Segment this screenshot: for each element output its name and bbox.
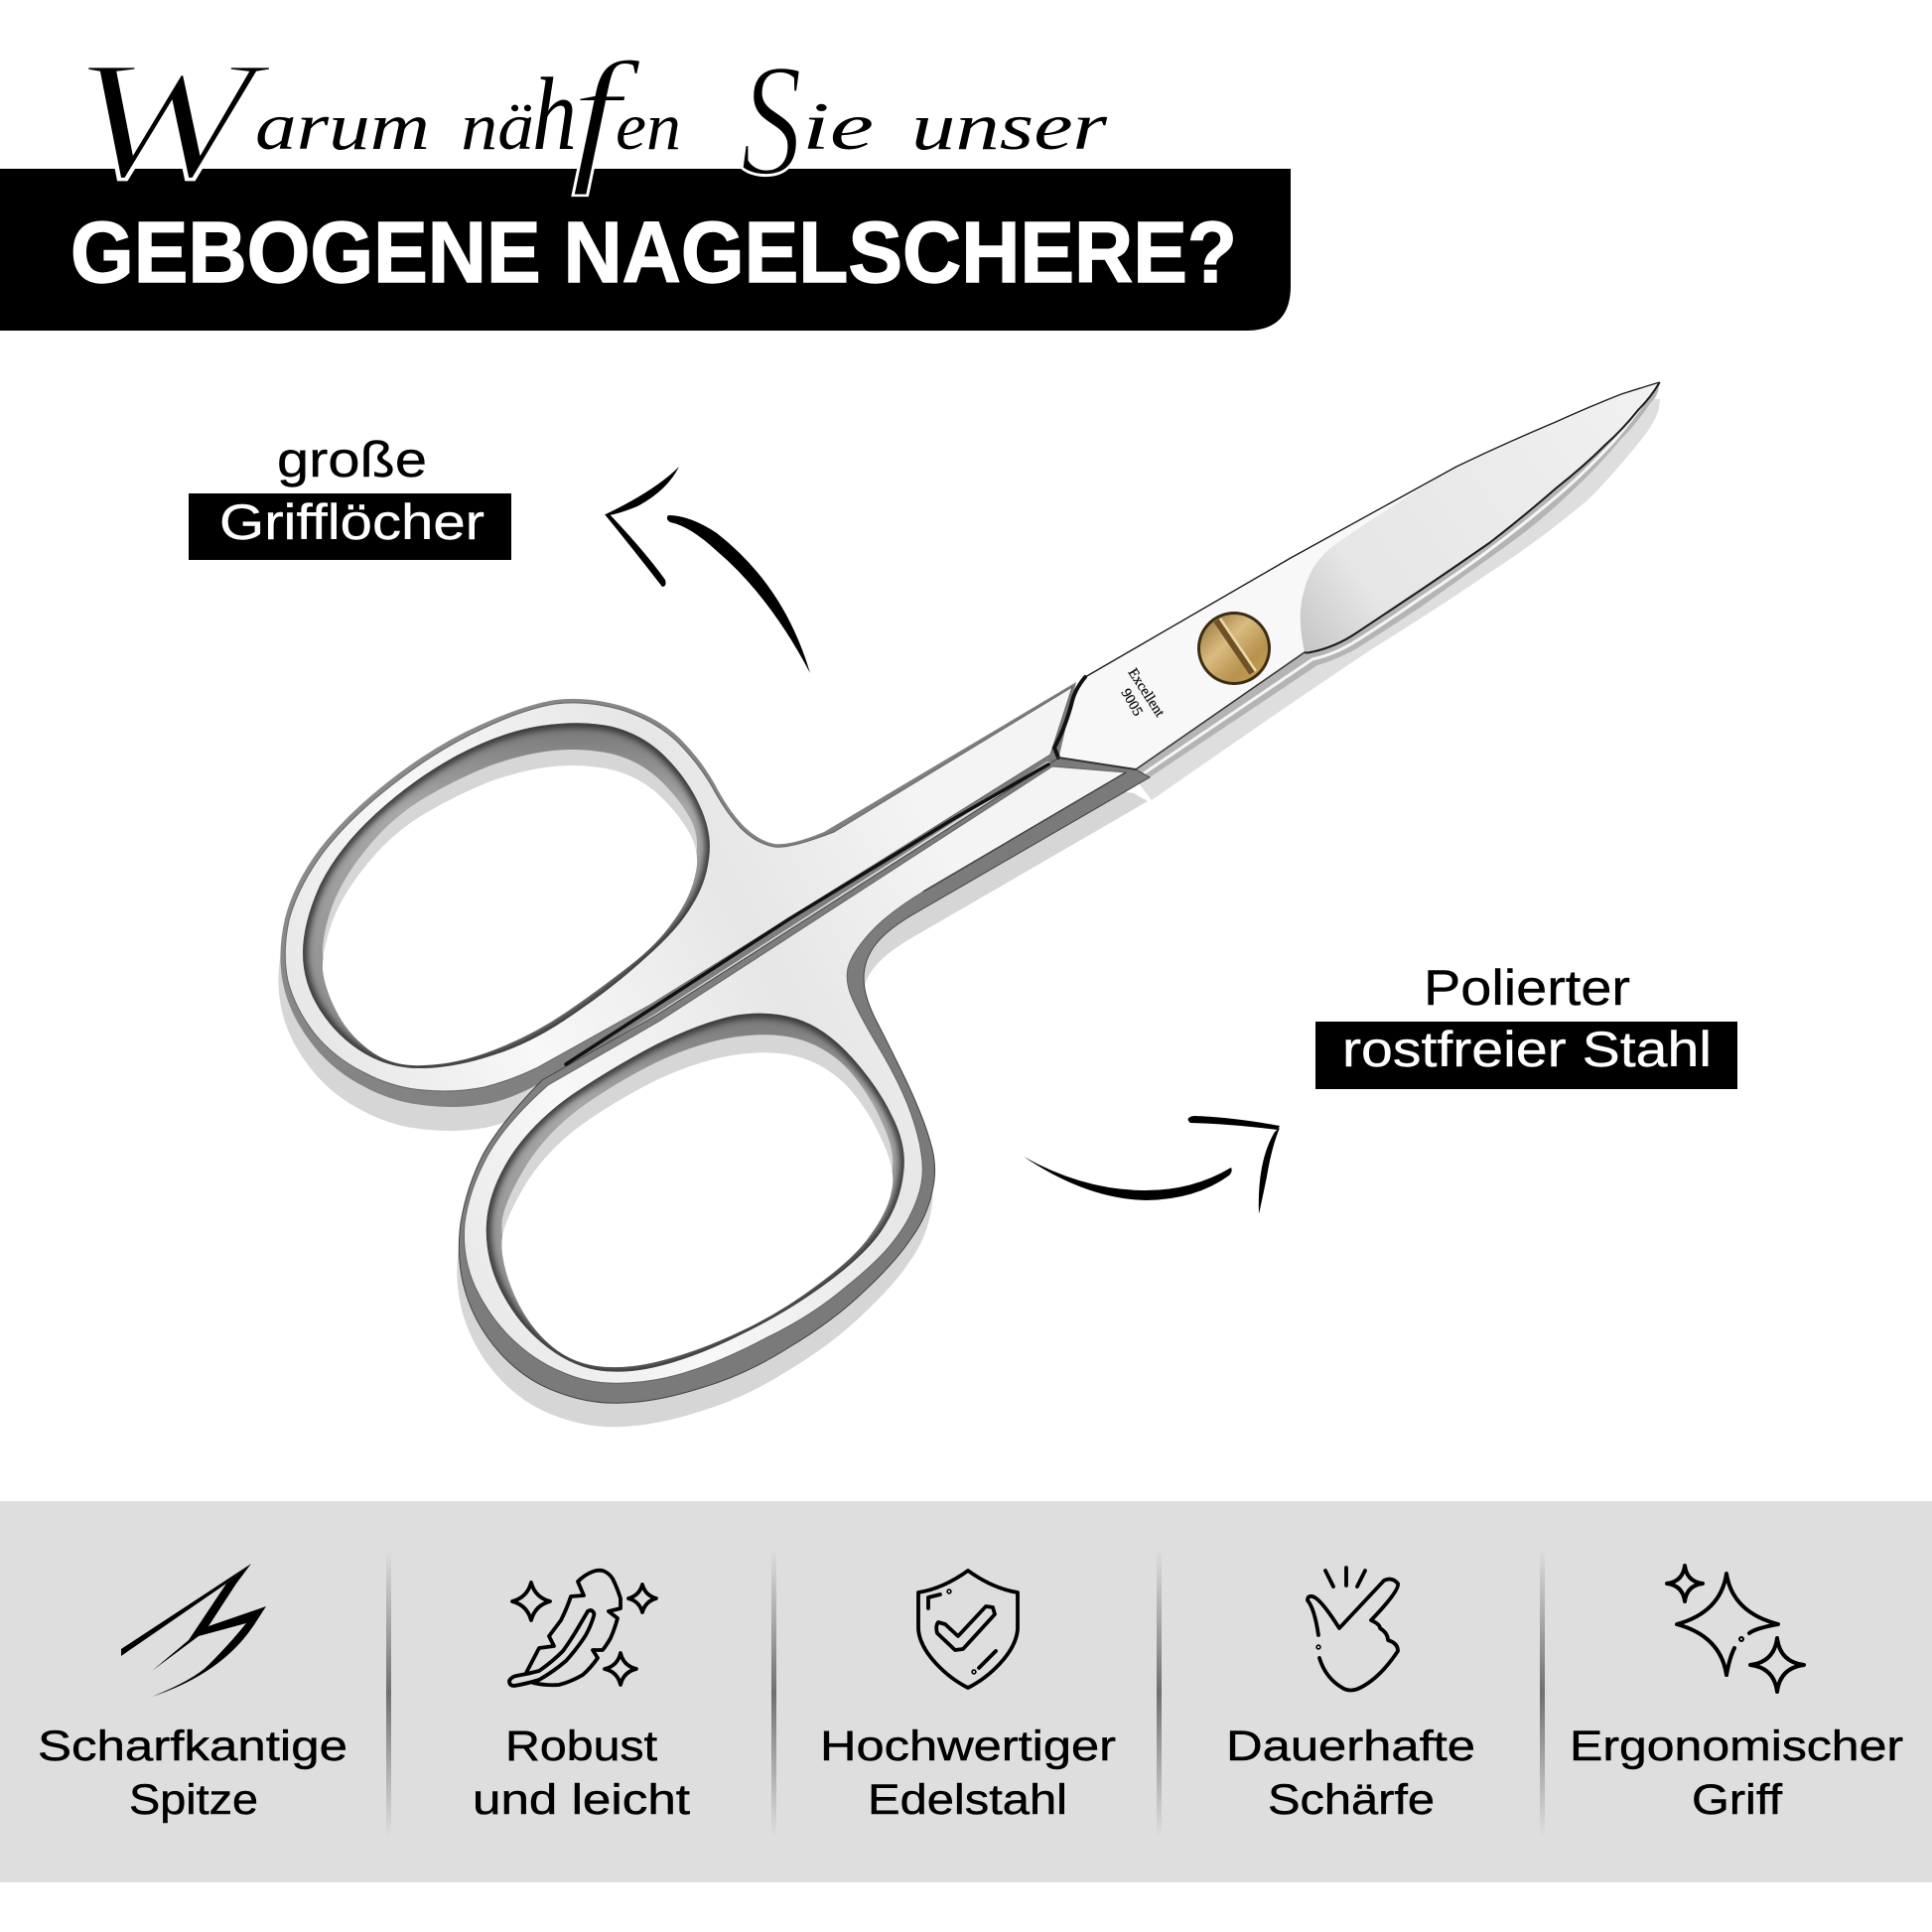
callout: Polierter rostfreier Stahl bbox=[1315, 960, 1737, 1089]
scissors: blade edge lines bbox=[1085, 382, 1660, 677]
scissors: lower blade bbox=[1136, 382, 1660, 777]
heading: script line: nä bbox=[443, 88, 534, 164]
label bbox=[1570, 1723, 1903, 1824]
heading banner bbox=[0, 169, 1291, 331]
scissors: upper handle bbox=[280, 682, 1076, 1107]
heading: script line: W bbox=[71, 27, 272, 213]
scissors: blade hollow bbox=[1301, 382, 1660, 653]
label: Hochwertiger bbox=[820, 1723, 1116, 1770]
label: Edelstahl bbox=[868, 1776, 1067, 1824]
label: Scharfkantige bbox=[38, 1723, 347, 1770]
callout: Polierter rostfreier Stahl: Polierter bbox=[1424, 960, 1630, 1016]
label: und leicht bbox=[473, 1776, 690, 1824]
scissors: upper blade bbox=[1054, 382, 1660, 769]
heading: bold title: GEBOGENE NAGELSCHERE? bbox=[70, 205, 1237, 301]
icon: shield with check bbox=[918, 1571, 1018, 1688]
heading: script line: S bbox=[710, 32, 802, 209]
callout: Polierter rostfreier Stahl: rostfreier Stahl bbox=[1342, 1022, 1712, 1077]
feature: Dauerhafte Schärfe bbox=[1226, 1568, 1475, 1824]
callout: große Grifflöcher bbox=[189, 432, 511, 560]
scissors: engraved brand: 9005 bbox=[1118, 686, 1146, 719]
scissors: engraved brand: Excellent bbox=[1125, 665, 1168, 720]
scissors: gold screw bbox=[1197, 612, 1271, 685]
panel: feature strip bbox=[0, 1501, 1932, 1882]
label: Ergonomischer bbox=[1570, 1723, 1903, 1770]
scissors: lower handle bbox=[459, 758, 1150, 1403]
arrow: from scissors to steel label bbox=[1024, 1116, 1280, 1214]
label: Griff bbox=[1692, 1776, 1783, 1824]
label bbox=[473, 1723, 690, 1824]
heading: script line: f bbox=[571, 32, 641, 197]
callout: große Grifflöcher: große bbox=[277, 432, 427, 487]
label bbox=[820, 1723, 1116, 1824]
heading: script line: arum bbox=[255, 88, 430, 164]
heading: script line: unser bbox=[890, 88, 1108, 164]
feature: Ergonomischer Griff bbox=[1570, 1566, 1903, 1824]
label bbox=[1226, 1723, 1475, 1824]
scissors photo illustration bbox=[278, 382, 1660, 1427]
label: Schärfe bbox=[1268, 1776, 1435, 1824]
feature: Robust und leicht bbox=[473, 1571, 690, 1824]
heading: script line: en bbox=[616, 88, 681, 164]
arrow: to handles bbox=[605, 467, 810, 673]
feature: Scharfkantige Spitze bbox=[38, 1564, 347, 1824]
label: Dauerhafte bbox=[1226, 1723, 1475, 1770]
label: Robust bbox=[505, 1723, 657, 1770]
heading: script line: ie bbox=[802, 88, 874, 164]
callout: große Grifflöcher: Grifflöcher bbox=[219, 494, 484, 550]
heading: script line: h bbox=[532, 56, 577, 172]
scissors: parting and pivot lines bbox=[566, 652, 1305, 1064]
feature: Hochwertiger Edelstahl bbox=[820, 1571, 1116, 1824]
scissors: drop shadow bbox=[278, 399, 1660, 1427]
label bbox=[38, 1723, 347, 1824]
icon: sparkles bbox=[1667, 1566, 1804, 1692]
icon: sharp tips bbox=[121, 1564, 266, 1697]
icon: hand snapping fingers bbox=[1308, 1568, 1398, 1690]
label: Spitze bbox=[129, 1776, 258, 1824]
icon: feather with sparkles bbox=[509, 1571, 656, 1686]
